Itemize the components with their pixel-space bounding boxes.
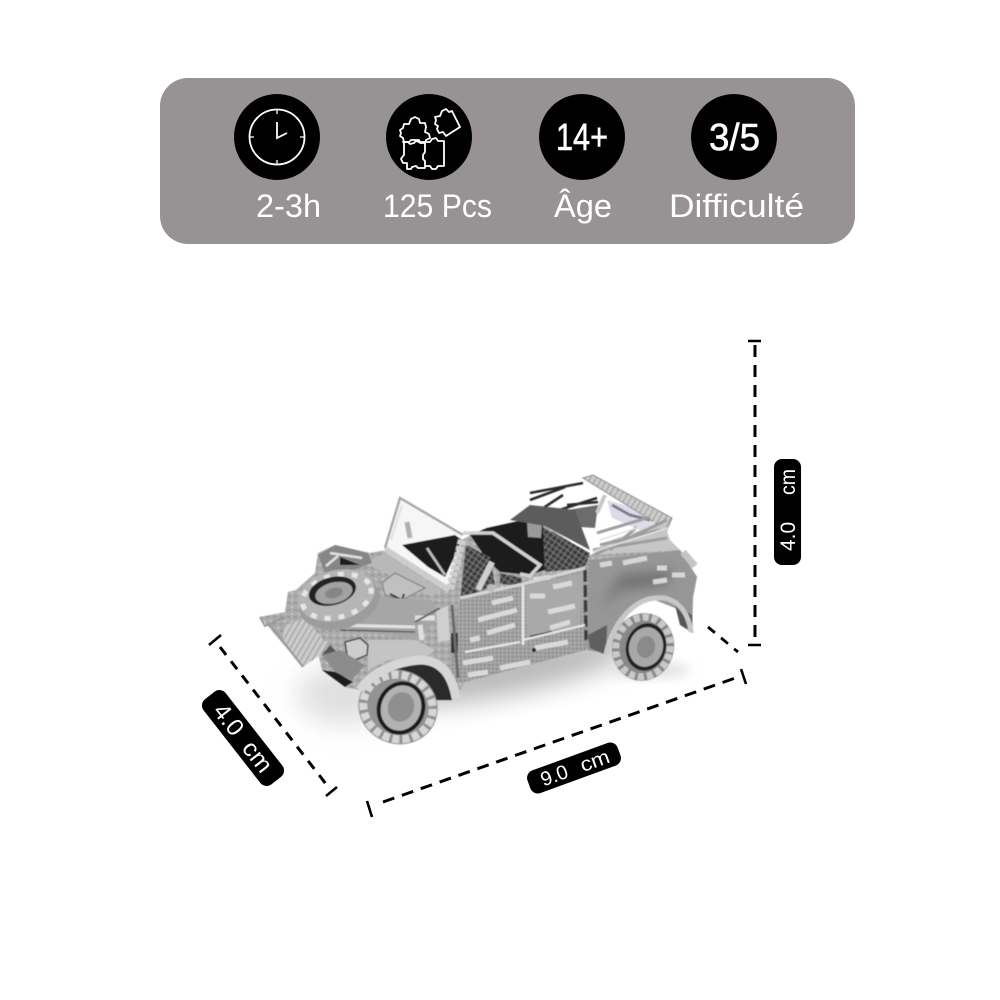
front wheel xyxy=(348,659,452,755)
icon: clock xyxy=(250,110,304,164)
windshield frame and glass xyxy=(385,498,463,590)
spec: difficulty: 3/5 xyxy=(709,117,760,159)
shadow under the car xyxy=(297,624,690,725)
rear fender xyxy=(606,598,693,655)
spec: recommended age: Âge xyxy=(554,188,612,224)
dimension: length 9.0 cm: cm xyxy=(577,746,613,777)
dimension: height 4.0 cm xyxy=(748,341,801,645)
spec: difficulty: Difficulté xyxy=(669,188,804,224)
dimension: length 9.0 cm xyxy=(367,669,746,817)
spec: recommended age: 14+ xyxy=(556,117,608,159)
rear wheel xyxy=(604,606,682,688)
spec: recommended age xyxy=(539,94,625,224)
engine parts xyxy=(318,545,372,668)
dimension: width 4.0 cm: cm xyxy=(236,736,278,778)
rear roof rack and folded top xyxy=(525,475,682,557)
dimension: height 4.0 cm: cm xyxy=(777,469,800,495)
spare wheel on hood xyxy=(292,561,386,638)
car body base silhouette xyxy=(260,520,697,697)
hood xyxy=(333,553,442,670)
rear body panel xyxy=(583,550,697,655)
spec: piece count: 125 Pcs xyxy=(383,188,492,224)
spec: assembly time xyxy=(234,94,321,224)
dimension: width 4.0 cm: 4.0 xyxy=(207,698,249,741)
door and side body xyxy=(436,560,590,683)
spec: piece count xyxy=(383,94,492,224)
interior and seats xyxy=(385,505,590,600)
spec: assembly time: 2-3h xyxy=(256,188,321,224)
dimension: rear depth guide xyxy=(708,627,738,652)
dimension: height 4.0 cm: 4.0 xyxy=(777,522,800,551)
metal model car xyxy=(260,475,697,755)
icon: puzzle pieces xyxy=(400,109,460,169)
spec: difficulty xyxy=(669,94,804,224)
front fender xyxy=(360,660,456,698)
dimension: length 9.0 cm: 9.0 xyxy=(538,761,571,791)
dimension: width 4.0 cm xyxy=(199,635,337,796)
panel: specifications bar xyxy=(160,78,855,244)
front grille and bumper xyxy=(260,617,365,687)
